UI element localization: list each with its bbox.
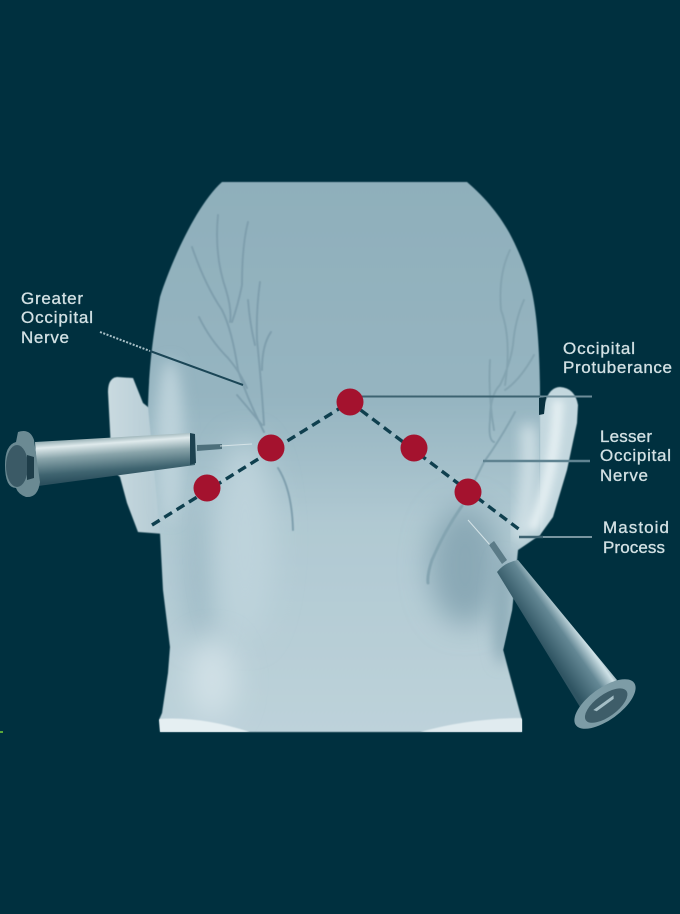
dashed injection line [152,402,520,530]
leader: lesser occipital nerve [483,460,590,462]
greater occipital nerve branches [192,215,293,530]
right ear [515,387,578,540]
leader: occipital protuberance [360,396,592,415]
label: lesser occipital nerve: Lesser [600,427,652,446]
label: mastoid process: Mastoid [603,518,669,537]
syringe: right [468,520,644,738]
label: lesser occipital nerve: Nerve [600,466,648,485]
left ear [108,377,165,534]
leader: greater occipital nerve [100,332,243,385]
red injection points [194,388,482,506]
label: greater occipital nerve: Greater [21,289,83,308]
needle [197,444,222,451]
label: mastoid process: Process [603,538,665,557]
artifact pixel [0,731,3,733]
label: occipital protuberance: Protuberance [563,358,672,377]
barrel [35,433,195,486]
lesser occipital nerve branches [428,250,534,583]
label: greater occipital nerve: Nerve [21,328,69,347]
syringe: left [5,431,252,497]
plunger flange [5,431,40,497]
head silhouette [148,182,558,732]
label: greater occipital nerve: Occipital [21,308,93,327]
plunger flange [566,670,644,738]
barrel [497,560,617,707]
label: occipital protuberance: Occipital [563,339,635,358]
leader: mastoid process [519,536,592,538]
needle [468,520,490,545]
label: lesser occipital nerve: Occipital [600,446,671,465]
